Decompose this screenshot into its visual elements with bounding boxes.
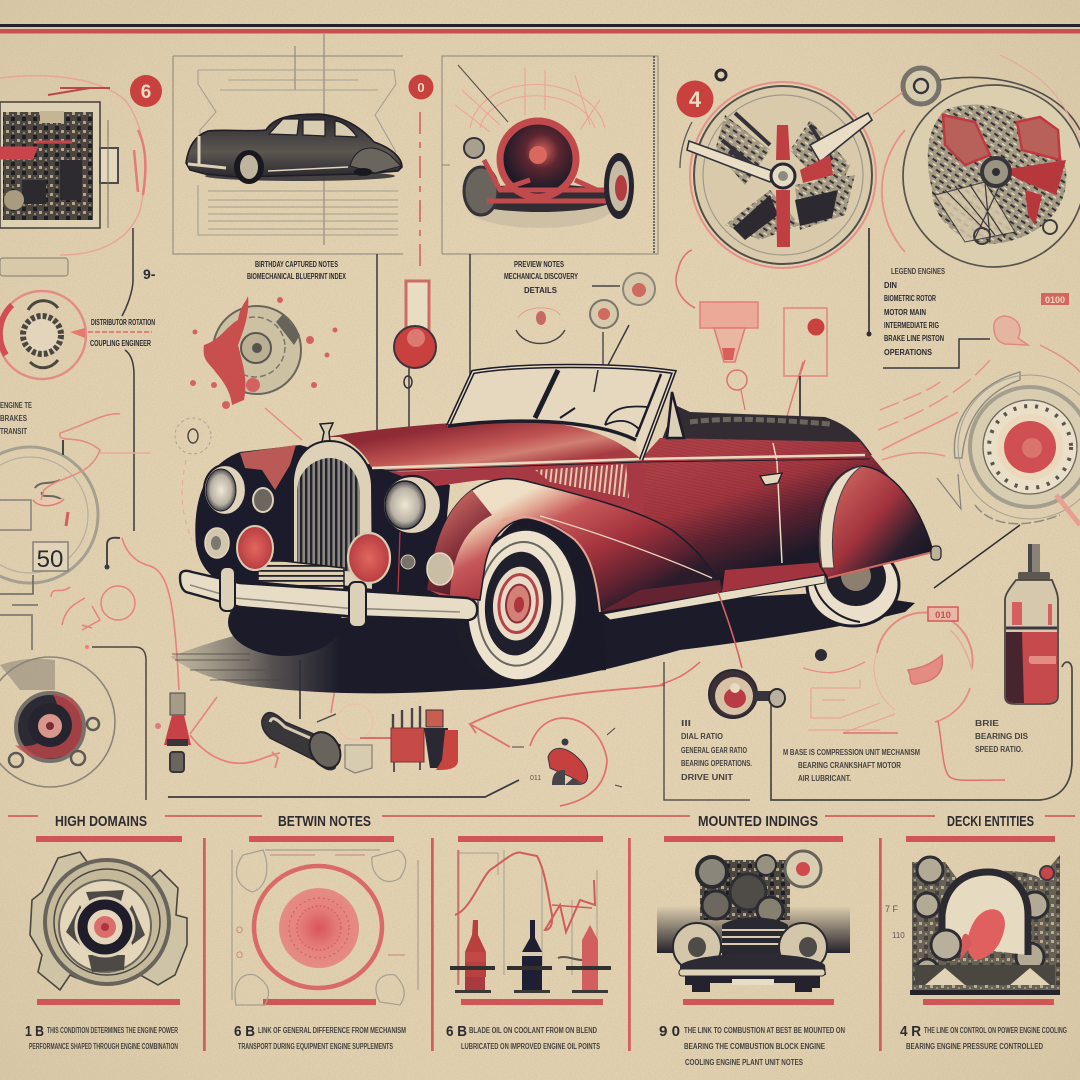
caption: sphere panel: MECHANICAL DISCOVERY	[504, 272, 578, 281]
car: rear body	[640, 438, 932, 605]
text block: left middle: TRANSIT	[0, 427, 27, 436]
car: lower grille	[258, 558, 344, 590]
text block: column three	[446, 1023, 600, 1051]
frames: lower right brackets	[664, 662, 1072, 800]
car: front bumper	[180, 567, 477, 627]
icon: red bell valve	[709, 670, 785, 718]
sedan car	[186, 114, 402, 184]
text block: under bell: III	[681, 719, 691, 728]
panel: speedometer 50: 50	[37, 546, 63, 573]
text block: column four: THE LINK TO COMBUSTION AT BEST BE MOUNTED ON	[684, 1026, 845, 1035]
caption: sedan panel	[247, 260, 346, 281]
icon: red test tube	[155, 693, 280, 772]
car: wheel arch	[482, 517, 606, 680]
connector: base sweep	[168, 780, 519, 797]
text block: left ring label: DISTRIBUTOR ROTATION	[91, 318, 155, 327]
top rules	[0, 24, 1080, 34]
text block: column three: LUBRICATED ON IMPROVED ENGINE OIL POINTS	[461, 1042, 600, 1051]
arrow: long red return	[470, 685, 665, 747]
text block: column five	[900, 1023, 1067, 1051]
car: louvres	[535, 464, 629, 498]
icon: red fluid bottle	[1005, 544, 1058, 704]
text block: column three: BLADE OIL ON COOLANT FROM ON BLEND	[469, 1026, 597, 1035]
icon: pink target: O	[236, 925, 243, 935]
icon: ring marker	[716, 68, 939, 114]
text block: column five: BEARING ENGINE PRESSURE CONTROLLED	[906, 1042, 1043, 1051]
text block: upper right: BIOMETRIC ROTOR	[884, 294, 936, 303]
heading: column one: HIGH DOMAINS	[55, 813, 147, 830]
caption: sedan panel: BIRTHDAY CAPTURED NOTES	[255, 260, 338, 269]
icons: small dials	[516, 273, 655, 365]
stamp: upper right	[1041, 293, 1069, 305]
car: sill chrome	[603, 562, 825, 620]
icon: grey gear wheel	[30, 852, 187, 990]
panel: right target dial	[934, 372, 1080, 588]
text block: column four: 9 0	[659, 1023, 680, 1040]
text block: left middle	[0, 401, 32, 436]
text block: left middle: ENGINE TE	[0, 401, 32, 410]
car: interior	[655, 405, 872, 458]
panel: lower-left wheel	[0, 586, 135, 787]
car: front wheel	[447, 522, 585, 691]
section heading rule	[8, 815, 1075, 817]
panel: left pink ring	[0, 291, 86, 379]
panel: left machine	[0, 76, 145, 276]
text block: column four: BEARING THE COMBUSTION BLOCK ENGINE	[684, 1042, 826, 1051]
text block: column four: COOLING ENGINE PLANT UNIT NOTES	[685, 1058, 804, 1067]
icon: spanner assembly	[262, 620, 392, 773]
car: right headlight	[383, 476, 441, 534]
car: door seam and handle	[760, 443, 782, 563]
icon: splattered gear	[190, 296, 338, 440]
icon: pink switch box	[780, 308, 827, 440]
text block: bottle label: SPEED RATIO.	[975, 745, 1023, 754]
dashed leader	[419, 112, 421, 268]
car: rear fender	[818, 466, 941, 578]
leader with dot	[866, 228, 872, 336]
connector: lower-left bracket	[85, 645, 146, 800]
caption: sphere panel	[504, 260, 578, 295]
stamp: upper right: 0100	[1045, 295, 1065, 305]
icon: front car and machinery	[657, 851, 850, 992]
chart: red line and bottles	[450, 850, 611, 993]
badge: center number	[408, 74, 434, 100]
text block: column four	[659, 1023, 845, 1067]
column dividers	[203, 838, 882, 1051]
text block: bottle label: BRIE	[975, 719, 1000, 728]
caption: sphere panel: PREVIEW NOTES	[514, 260, 564, 269]
badge: left number	[130, 75, 162, 107]
text block: center lower: BEARING CRANKSHAFT MOTOR	[798, 761, 901, 770]
badge: center number: 0	[417, 80, 425, 95]
car: classic red convertible	[180, 365, 941, 691]
car: front fender	[427, 479, 722, 613]
text block: column two: LINK OF GENERAL DIFFERENCE FROM MECHANISM	[258, 1026, 406, 1035]
icon: pink target	[232, 850, 418, 1005]
car: grille	[293, 441, 373, 590]
car: shadow	[170, 592, 915, 693]
car: front dark mass	[195, 445, 450, 602]
icon: red battery block	[391, 706, 458, 772]
stamp: lower right	[928, 607, 958, 621]
text block: upper right: MOTOR MAIN	[884, 308, 926, 317]
ring marker on left	[175, 418, 211, 540]
panel: lower right sketch	[660, 612, 973, 733]
text block: upper right	[883, 267, 990, 368]
text block: upper right: OPERATIONS	[884, 348, 933, 357]
car: hood ornament	[320, 423, 333, 442]
text block: column one: THIS CONDITION DETERMINES THE ENGINE POWER	[47, 1026, 178, 1035]
car: hood	[326, 421, 642, 472]
text block: column five: 4 R	[900, 1023, 921, 1040]
text block: column two	[234, 1023, 406, 1051]
car: windshield	[448, 365, 684, 460]
panel: engine dial two	[882, 55, 1080, 267]
connector: red route to tube	[104, 538, 179, 690]
text block: upper right: BRAKE LINE PISTON	[884, 334, 944, 343]
text block: column one	[25, 1023, 178, 1051]
text block: column one: PERFORMANCE SHAPED THROUGH ENGINE COMBINATION	[29, 1042, 178, 1051]
icon: red component in ring: 011	[530, 775, 541, 782]
car: far front wheel	[228, 588, 342, 656]
panel: speedometer 50	[0, 414, 150, 594]
text block: center lower	[783, 748, 920, 783]
text block: under bell: GENERAL GEAR RATIO	[681, 746, 747, 755]
text block: column two: 6 B	[234, 1023, 255, 1040]
text block: center lower: AIR LUBRICANT.	[798, 774, 851, 783]
text block: left middle: BRAKES	[0, 414, 28, 423]
caption: sedan panel: BIOMECHANICAL BLUEPRINT INDEX	[247, 272, 346, 281]
icon: steampunk machine	[885, 855, 1060, 995]
stamp: lower right: 010	[935, 610, 951, 621]
text block: upper right: LEGEND ENGINES	[891, 267, 945, 276]
red bars	[36, 836, 1055, 1005]
text block: bottle label: BEARING DIS	[975, 732, 1029, 741]
car: small lamps	[205, 488, 453, 592]
car: cowl panel	[372, 460, 645, 600]
badge: dial number: 4	[689, 87, 702, 112]
car: left fender top	[240, 445, 296, 490]
text block: column one: 1 B	[25, 1023, 44, 1040]
text block: bottle label	[975, 719, 1029, 754]
text block: column two: TRANSPORT DURING EQUIPMENT ENGINE SUPPLEMENTS	[238, 1042, 393, 1051]
badge: dial number	[676, 80, 714, 118]
heading: column three: MOUNTED INDINGS	[698, 813, 818, 830]
text block: upper right: DIN	[884, 281, 897, 290]
car: left headlight	[204, 465, 246, 515]
icon: red component in ring	[512, 718, 622, 806]
caption: sphere panel: DETAILS	[524, 286, 558, 295]
text block: left ring label	[88, 318, 155, 348]
pink speed lines	[878, 360, 990, 460]
label: small number: 9-	[143, 266, 156, 282]
icon: pink lid and funnel	[676, 250, 758, 410]
car: chrome belt line	[372, 455, 865, 468]
text block: under bell: BEARING OPERATIONS.	[681, 759, 752, 768]
text block: under bell: DRIVE UNIT	[681, 773, 733, 782]
icon: steampunk machine: 110	[892, 931, 905, 940]
car: rear wheel	[807, 544, 899, 626]
icon: dark dot	[815, 649, 827, 661]
leader: chassis to bell	[718, 592, 742, 668]
icon: pink valve	[994, 316, 1080, 372]
panel: engine dial one	[680, 82, 876, 268]
icon: pink target: O	[236, 950, 243, 960]
text block: left ring label: COUPLING ENGINEER	[90, 339, 151, 348]
text block: under bell: DIAL RATIO	[681, 732, 723, 741]
heading: column two: BETWIN NOTES	[278, 813, 371, 830]
icon: thermometer	[394, 281, 436, 437]
panel: sedan drawing	[173, 34, 403, 254]
panel: red sphere car	[442, 56, 658, 254]
text block: column three: 6 B	[446, 1023, 467, 1040]
text block: center lower: M BASE IS COMPRESSION UNIT MECHANISM	[783, 748, 920, 757]
text block: under bell	[681, 719, 752, 782]
vertical leaders	[122, 228, 629, 531]
badge: left number: 6	[141, 82, 151, 103]
text block: upper right: INTERMEDIATE RIG	[884, 321, 939, 330]
heading: column four: DECKI ENTITIES	[947, 813, 1034, 830]
icon: steampunk machine: 7 F	[885, 904, 899, 914]
